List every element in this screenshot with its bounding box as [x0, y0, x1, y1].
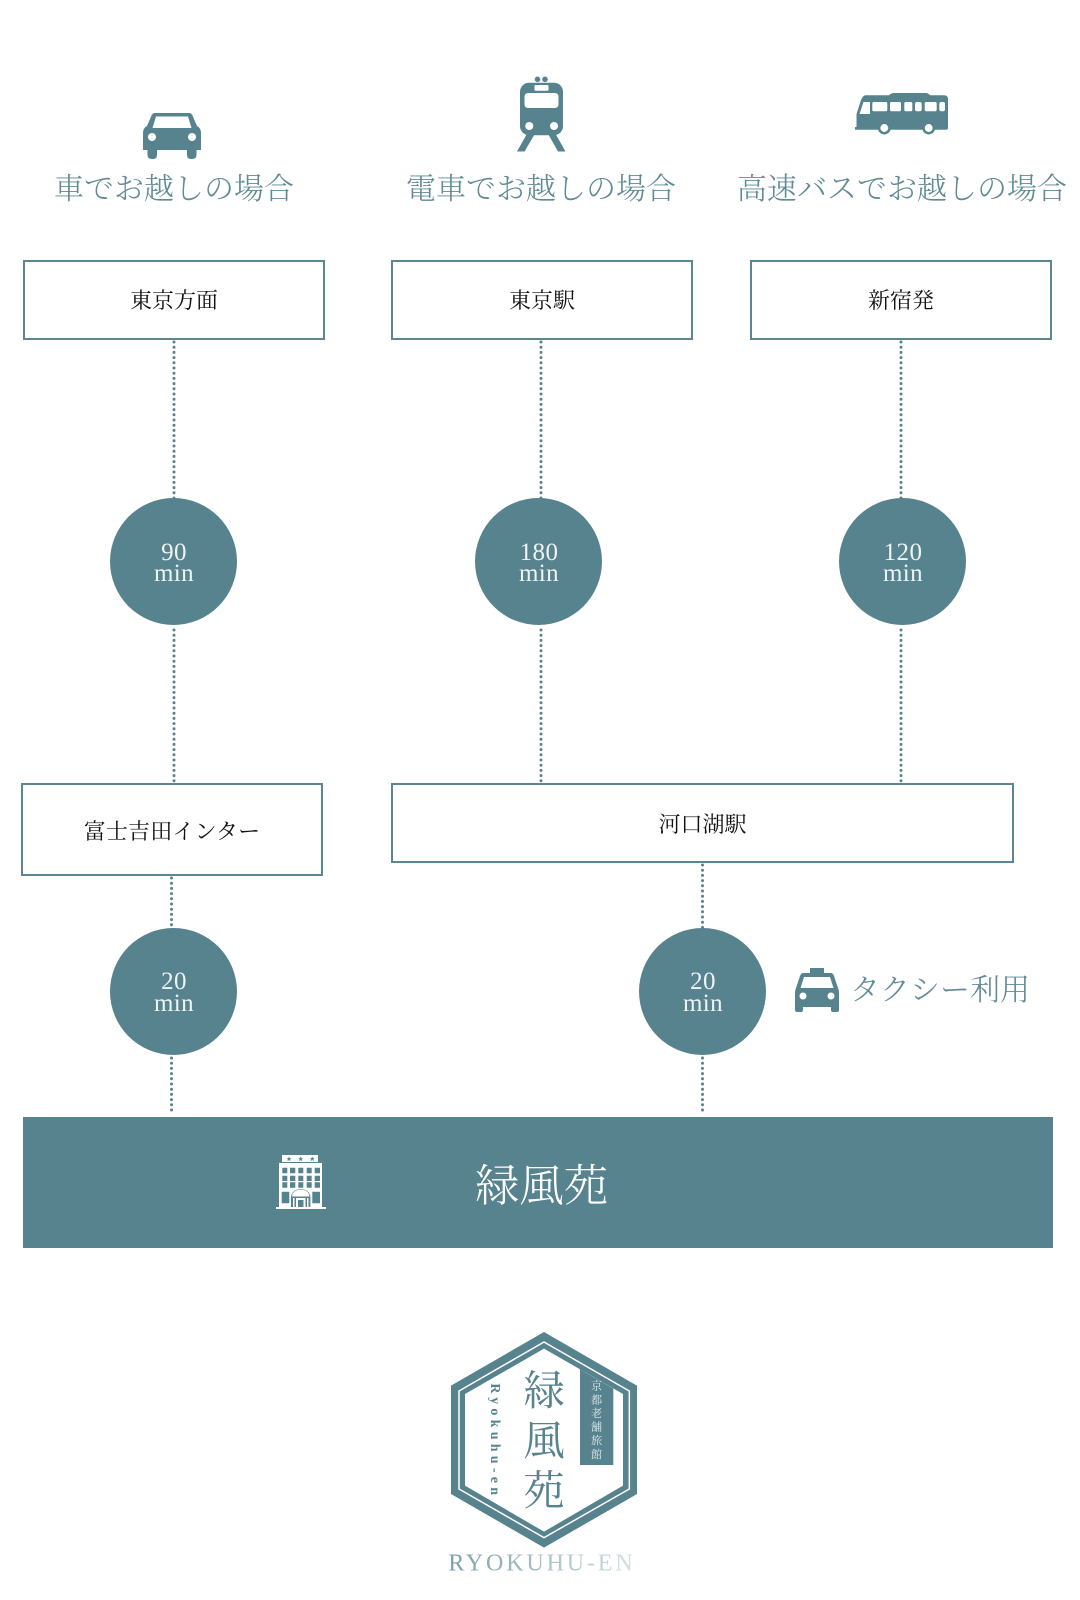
logo tagline: 京 — [591, 1380, 602, 1393]
circle: 120 min — [839, 498, 966, 625]
circle: 20 min taxi: min — [683, 990, 723, 1017]
logo vertical romaji: Ryokuhu-en — [487, 1383, 502, 1495]
title: Ryokufuen: 緑風苑 — [475, 1161, 608, 1211]
box: Tokyo Station: 東京駅 — [509, 288, 575, 313]
circle: 20 min car — [110, 928, 237, 1055]
logo tagline: 館 — [591, 1447, 602, 1461]
logo tagline: 都 — [591, 1393, 602, 1407]
label: taxi use: タクシー利用 — [850, 974, 1030, 1007]
circle: 90 min: 90 — [161, 539, 187, 566]
box: Tokyo Station — [391, 260, 693, 340]
heading: by highway bus: 高速バスでお越しの場合 — [737, 173, 1067, 206]
logo tagline: 老 — [591, 1406, 602, 1420]
box: Shinjuku departure: 新宿発 — [868, 288, 934, 313]
box: Fujiyoshida interchange — [21, 783, 323, 876]
circle: 180 min: min — [519, 560, 559, 587]
logo tagline: 舗 — [591, 1419, 602, 1433]
circle: 90 min — [110, 498, 237, 625]
logo: Ryokuhu-en hexagon — [448, 1332, 637, 1577]
logo kanji: 苑 — [523, 1468, 565, 1514]
icon: hotel — [276, 1155, 326, 1209]
box: Tokyo area — [23, 260, 325, 340]
box: Kawaguchiko Station — [391, 783, 1014, 863]
icon: bus — [855, 93, 948, 134]
icon: taxi — [795, 968, 839, 1012]
circle: 90 min: min — [154, 560, 194, 587]
logo tagline: 旅 — [591, 1433, 602, 1447]
box: Kawaguchiko Station: 河口湖駅 — [658, 812, 746, 837]
logo kanji: 風 — [523, 1418, 565, 1464]
box: Tokyo area: 東京方面 — [130, 288, 218, 313]
circle: 20 min taxi — [639, 928, 766, 1055]
icon: car — [143, 113, 201, 159]
logo kanji — [523, 1368, 565, 1514]
logo kanji: 緑 — [523, 1368, 565, 1414]
circle: 20 min car: 20 — [161, 968, 187, 995]
circle: 180 min: 180 — [520, 539, 558, 566]
panel: destination bar — [23, 1117, 1053, 1248]
heading: by train: 電車でお越しの場合 — [406, 173, 676, 206]
circle: 20 min car: min — [154, 990, 194, 1017]
box: Shinjuku departure — [750, 260, 1052, 340]
circle: 180 min — [475, 498, 602, 625]
heading: by car: 車でお越しの場合 — [54, 173, 294, 206]
circle: 120 min: 120 — [884, 539, 922, 566]
circle: 120 min: min — [883, 560, 923, 587]
logo tagline — [591, 1380, 602, 1461]
icon: train — [517, 76, 566, 152]
box: Fujiyoshida interchange: 富士吉田インター — [84, 819, 260, 844]
circle: 20 min taxi: 20 — [690, 968, 716, 995]
logo wordmark: RYOKUHU-EN — [448, 1551, 633, 1577]
